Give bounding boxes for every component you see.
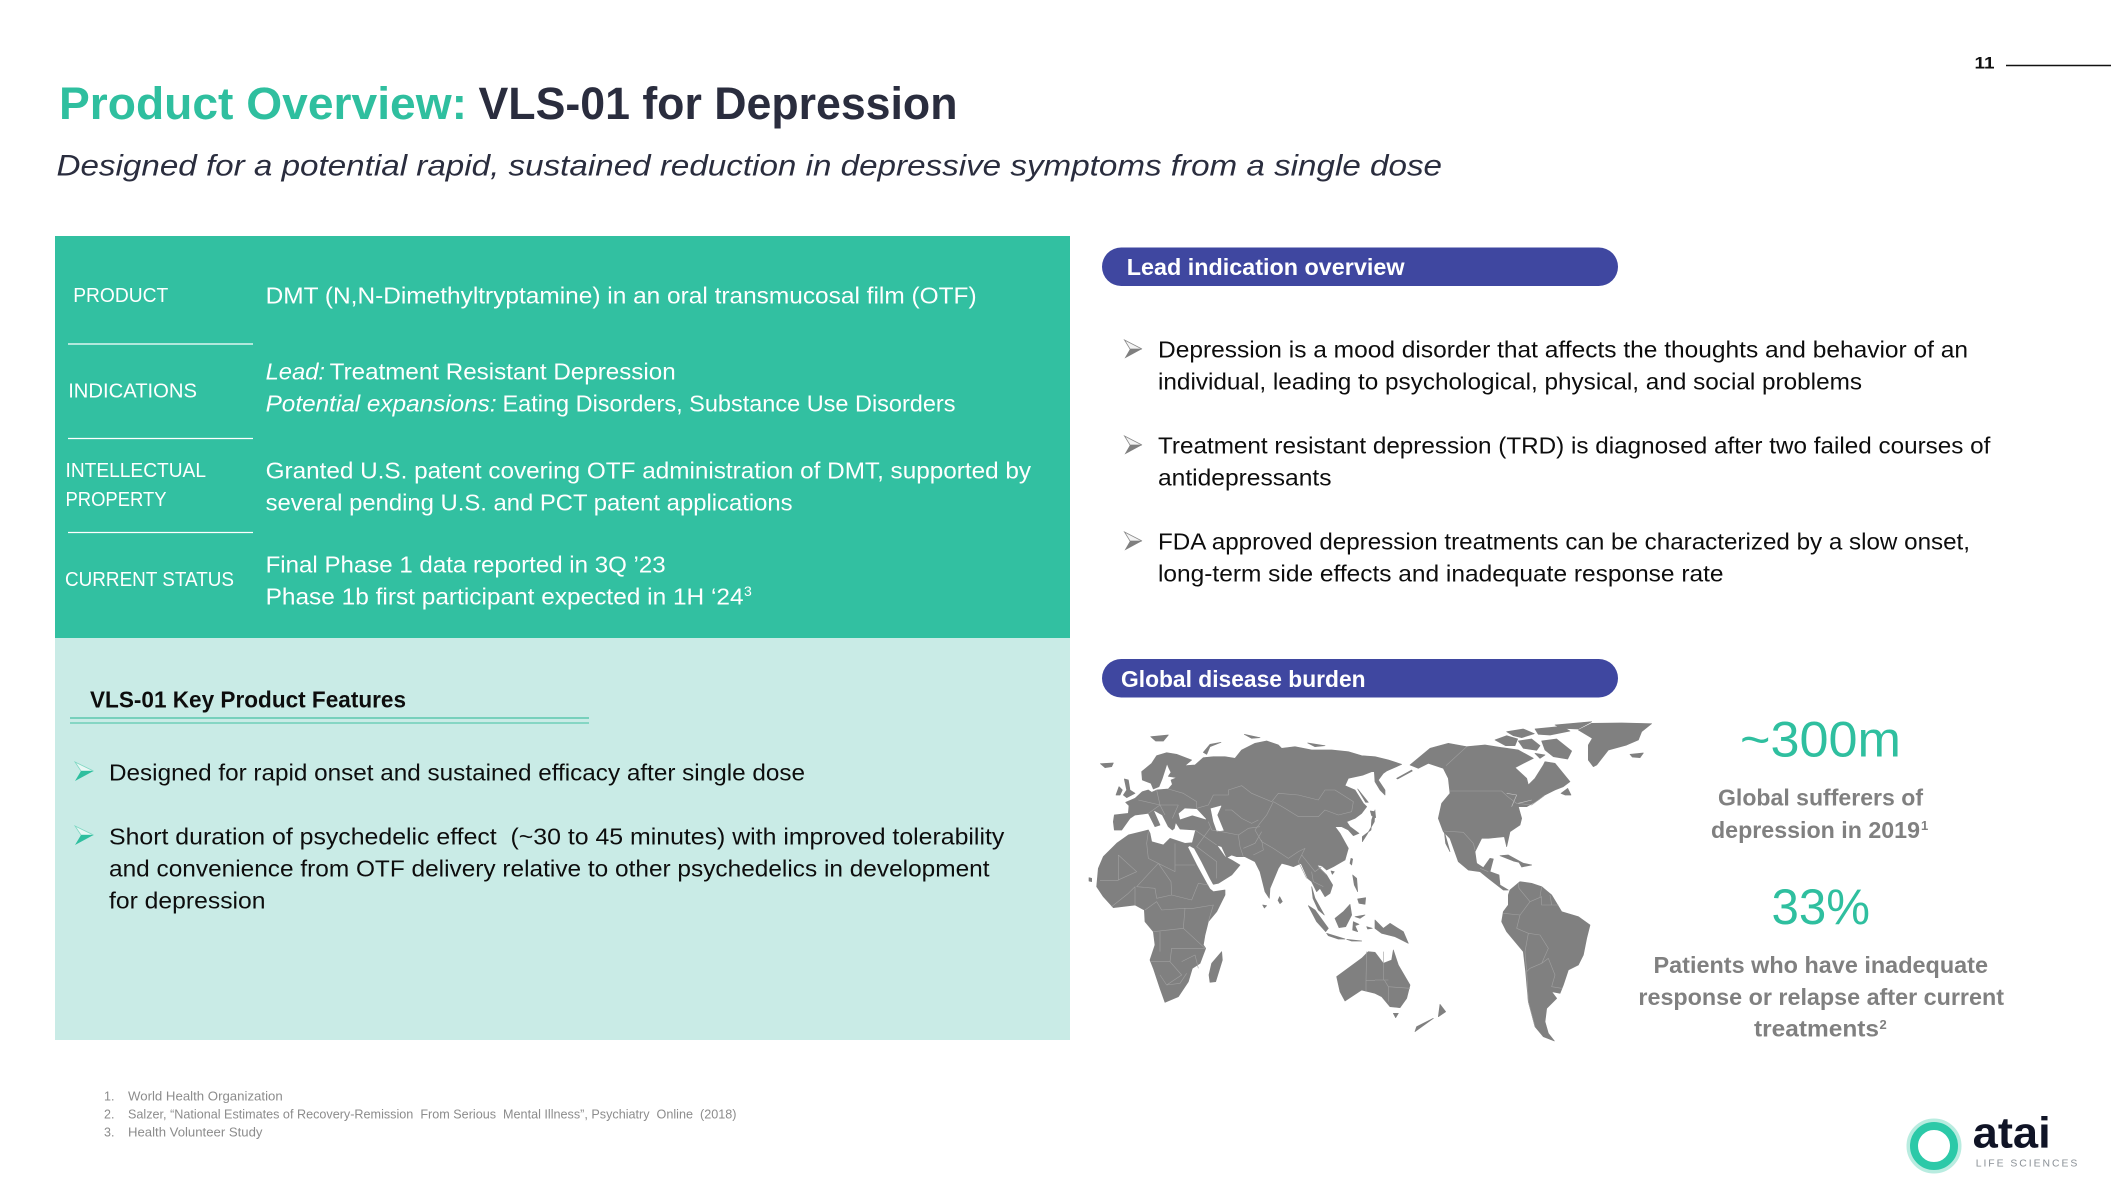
bullet: treatment resistant depression: Treatment resistant depression (TRD) is diagnosed after two failed courses of (1158, 433, 1991, 459)
row: current status: CURRENT STATUS (65, 568, 234, 591)
row: intellectual property: several pending U.S. and PCT patent applications (266, 489, 793, 515)
Novaya Zemlya (1203, 742, 1221, 754)
pill: global disease burden: Global disease burden (1121, 666, 1366, 692)
Borneo (1335, 904, 1352, 928)
footnotes: 3. (104, 1125, 114, 1139)
footnotes: 1. (104, 1089, 114, 1103)
Philippines (1353, 875, 1358, 892)
row: intellectual property: INTELLECTUAL (66, 459, 206, 482)
icon: teal arrow bullet (75, 762, 94, 781)
bullet: treatment resistant depression (1124, 433, 1991, 491)
pill: lead indication overview (1102, 248, 1618, 286)
Madagascar (1209, 952, 1222, 982)
feature: short duration: Short duration of psychedelic effect (~30 to 45 minutes) with improved tolerability (109, 824, 1005, 850)
Iceland east copy (1630, 753, 1643, 758)
pill: global disease burden (1102, 659, 1618, 698)
North and Central America (1410, 743, 1570, 890)
page number: 11 (1974, 54, 1994, 72)
row: current status (65, 551, 752, 609)
Canadian Arctic islands (1495, 736, 1518, 746)
South America (1502, 882, 1590, 1041)
Sri Lanka (1278, 897, 1282, 904)
list: lead indication bullets (1124, 337, 1991, 587)
Tasmania (1393, 1013, 1398, 1018)
Greenland (1578, 723, 1652, 767)
row: indications (68, 358, 955, 416)
stat label: inadequate response (1638, 952, 2004, 1042)
row: current status: 3 (744, 583, 752, 599)
Americas (1397, 722, 1652, 1041)
Java (1327, 933, 1345, 939)
stat label: inadequate response: Patients who have inadequate (1654, 952, 1988, 978)
Malay peninsula (1312, 887, 1324, 915)
bullet: mood disorder (1124, 337, 1968, 395)
stat label: global sufferers: Global sufferers of (1718, 785, 1923, 811)
subtitle: Designed for a potential rapid, sustained reduction in depressive symptoms from a single dose (56, 150, 1442, 182)
Black Sea (1179, 809, 1206, 819)
row: intellectual property (66, 457, 1031, 515)
Japan (1362, 810, 1375, 842)
stat label: inadequate response: 2 (1880, 1017, 1887, 1032)
page number (1974, 54, 2111, 72)
stat label: global sufferers: depression in 2019 (1711, 817, 1920, 843)
footnotes: 2. (104, 1107, 114, 1121)
row: product: DMT (N,N-Dimethyltryptamine) in an oral transmucosal film (OTF) (266, 282, 977, 308)
Cuba (1500, 855, 1523, 863)
Cape Verde (1089, 878, 1092, 882)
Eurasia and Africa (1097, 741, 1402, 1002)
Caspian Sea (1211, 806, 1223, 831)
New Guinea (1375, 920, 1408, 943)
Ireland (1116, 787, 1122, 795)
Taiwan (1350, 858, 1353, 865)
feature: rapid onset: Designed for rapid onset and sustained efficacy after single dose (109, 760, 805, 786)
footnotes (104, 1089, 736, 1139)
bullet: mood disorder: Depression is a mood disorder that affects the thoughts and behavior of an (1158, 337, 1968, 363)
row: indications: Lead: (266, 358, 325, 384)
Sulawesi (1353, 922, 1359, 932)
bullet: mood disorder: individual, leading to psychological, physical, and social problems (1158, 369, 1862, 395)
pill: lead indication overview: Lead indication overview (1127, 254, 1405, 280)
Sakhalin (1358, 789, 1368, 802)
icon: teal arrow bullet (75, 826, 94, 845)
stat: ~300m: ~300m (1740, 712, 1901, 768)
stat: 33%: 33% (1772, 879, 1870, 935)
stat: 33% (1638, 879, 2004, 1042)
title: VLS-01 for Depression (478, 78, 958, 129)
logo: atai life sciences: LIFE SCIENCES (1976, 1159, 2077, 1170)
row: indications: Treatment Resistant Depression (330, 358, 676, 384)
stat: ~300m (1711, 712, 1928, 843)
feature: short duration: and convenience from OTF delivery relative to other psychedelics in development (109, 856, 990, 882)
New Zealand (1438, 1004, 1446, 1017)
panel: product facts (55, 236, 1070, 638)
feature: short duration (109, 824, 1005, 914)
Svalbard (1151, 735, 1168, 741)
row: current status: Final Phase 1 data reported in 3Q ’23 (266, 551, 666, 577)
Newfoundland (1561, 788, 1571, 795)
footnotes: World Health Organization (128, 1089, 283, 1103)
footnotes: Health Volunteer Study (128, 1125, 263, 1139)
stat label: inadequate response: response or relapse after current (1638, 984, 2004, 1010)
icon: teal ring (1912, 1124, 1956, 1168)
Australia (1337, 950, 1410, 1008)
bullet: treatment resistant depression: antidepressants (1158, 465, 1332, 491)
world map (1089, 722, 1652, 1041)
row: indications: INDICATIONS (68, 379, 197, 402)
Hainan (1331, 871, 1334, 874)
Aleutians (1397, 770, 1412, 779)
heading: key product features: VLS-01 Key Product Features (90, 687, 406, 713)
title (59, 78, 958, 129)
Baja California (1444, 832, 1450, 852)
Sumatra (1308, 906, 1328, 932)
row: indications: Potential expansions: (266, 390, 497, 416)
logo: atai life sciences (1912, 1108, 2077, 1170)
UK (1123, 779, 1135, 798)
Hispaniola (1519, 862, 1532, 867)
feature: short duration: for depression (109, 888, 266, 914)
footnotes: Salzer, “National Estimates of Recovery-Remission From Serious Mental Illness”, Psychiatry Online (2018) (128, 1107, 736, 1121)
row: intellectual property: Granted U.S. patent covering OTF administration of DMT, supported by (266, 457, 1031, 483)
row: product: PRODUCT (73, 284, 169, 307)
country borders (1100, 747, 1562, 1027)
row: current status: Phase 1b first participant expected in 1H ‘24 (266, 583, 744, 609)
Iceland (1100, 763, 1113, 768)
panel: key product features (55, 638, 1070, 1040)
Arctic islands (1244, 734, 1260, 738)
title: Product Overview: (59, 78, 467, 129)
stat label: global sufferers (1711, 785, 1928, 843)
bullet: FDA approved treatments: long-term side effects and inadequate response rate (1158, 561, 1724, 587)
stat label: global sufferers: 1 (1921, 818, 1928, 833)
stat label: inadequate response: treatments (1754, 1016, 1879, 1042)
row: intellectual property: PROPERTY (66, 488, 167, 511)
logo: atai life sciences: atai (1973, 1108, 2051, 1158)
bullet: FDA approved treatments: FDA approved depression treatments can be characterized by a slow onset, (1158, 529, 1970, 555)
bullet: FDA approved treatments (1124, 529, 1970, 587)
row: indications: Eating Disorders, Substance Use Disorders (502, 390, 956, 416)
